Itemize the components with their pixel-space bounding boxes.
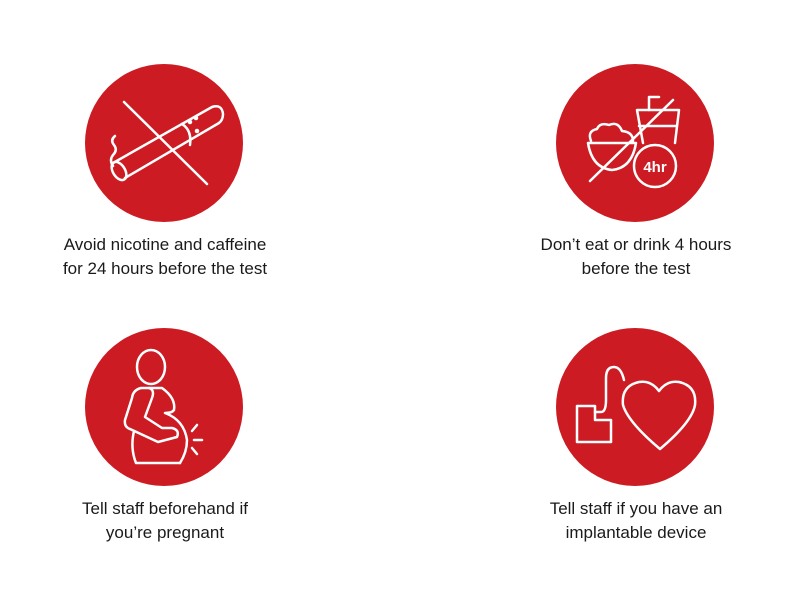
text: eat or drink: before the test: [582, 259, 690, 278]
text: eat or drink: [541, 235, 731, 278]
text: implantable device: implantable device: [566, 523, 706, 542]
text: implantable device: [550, 499, 722, 542]
text: pregnant: you’re pregnant: [106, 523, 224, 542]
text: nicotine and caffeine: for 24 hours before the test: [63, 259, 267, 278]
icon: implantable device: [556, 328, 714, 486]
4hr label: 4hr: [643, 159, 667, 176]
text: eat or drink: Don’t eat or drink 4 hours: [541, 235, 731, 254]
text: pregnant: Tell staff beforehand if: [82, 499, 248, 518]
text: implantable device: Tell staff if you have an: [550, 499, 722, 518]
icon: no food or drink: [556, 64, 714, 222]
text: nicotine and caffeine: [63, 235, 267, 278]
icon: pregnant: [85, 328, 243, 486]
text: nicotine and caffeine: Avoid nicotine and caffeine: [64, 235, 266, 254]
text: pregnant: [82, 499, 248, 542]
icon: no smoking: [85, 64, 243, 222]
